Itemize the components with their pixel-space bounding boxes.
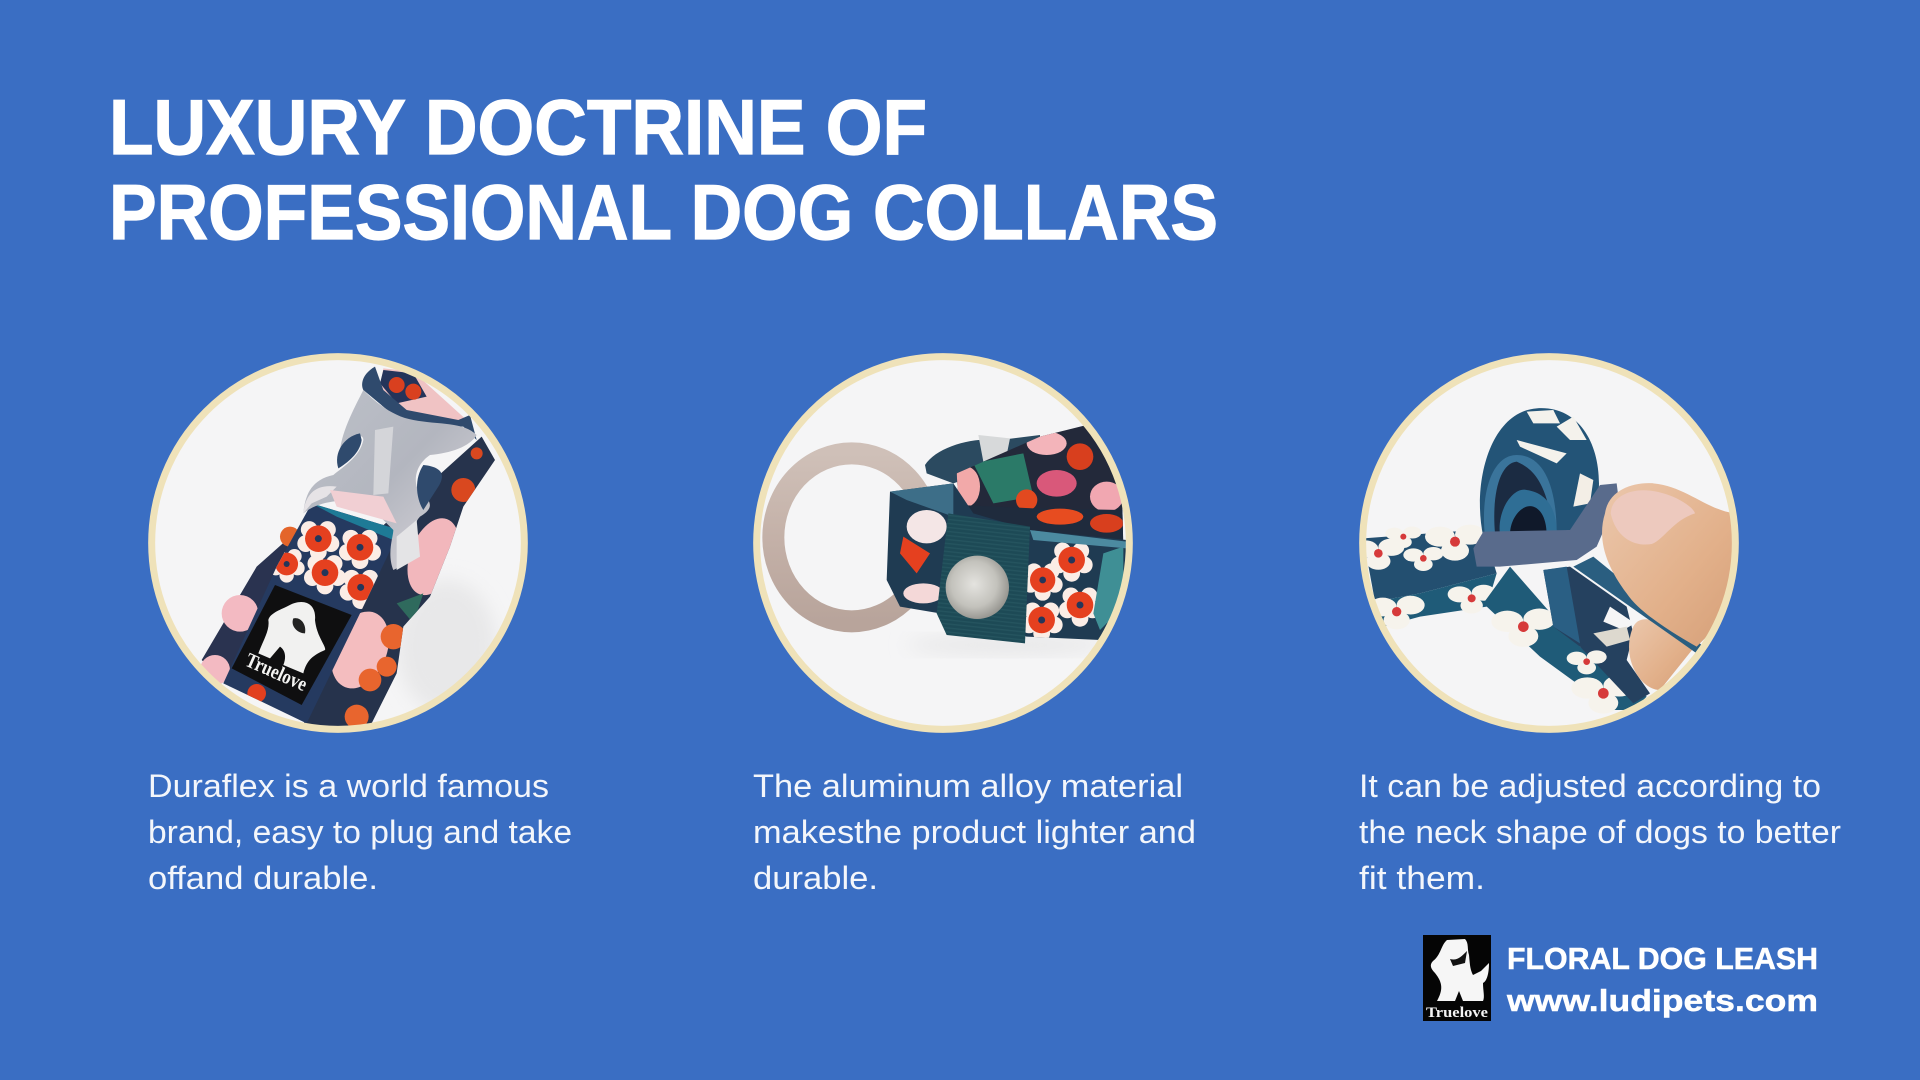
text block: Duraflex: Duraflex is a world famous bbox=[148, 768, 549, 804]
panel: buckle photo: Truelove bbox=[242, 649, 310, 696]
text block: Duraflex bbox=[148, 768, 572, 896]
icon: Truelove logo: Truelove bbox=[1426, 1005, 1488, 1021]
title: LUXURY DOCTRINE OF bbox=[109, 83, 927, 171]
title bbox=[109, 83, 1218, 256]
title: PROFESSIONAL DOG COLLARS bbox=[109, 168, 1218, 256]
text block: adjustable: fit them. bbox=[1359, 860, 1485, 896]
panel: aluminum ring photo bbox=[756, 356, 1130, 730]
icon: Truelove logo bbox=[1423, 935, 1491, 1021]
text block: adjustable bbox=[1359, 768, 1841, 896]
text block: Duraflex: offand durable. bbox=[148, 860, 378, 896]
text block: adjustable: the neck shape of dogs to better bbox=[1359, 814, 1841, 850]
text block: aluminum: durable. bbox=[753, 860, 878, 896]
footer text: FLORAL DOG LEASH bbox=[1507, 941, 1818, 976]
panel: adjustable slider photo bbox=[1352, 356, 1737, 730]
panel: buckle photo bbox=[151, 356, 525, 730]
text block: adjustable: It can be adjusted according to bbox=[1359, 768, 1821, 804]
text block: Duraflex: brand, easy to plug and take bbox=[148, 814, 572, 850]
footer text: www.ludipets.com bbox=[1506, 983, 1818, 1018]
text block: aluminum: makesthe product lighter and bbox=[753, 814, 1196, 850]
text block: aluminum: The aluminum alloy material bbox=[753, 768, 1183, 804]
footer text bbox=[1506, 941, 1818, 1018]
text block: aluminum bbox=[753, 768, 1196, 896]
